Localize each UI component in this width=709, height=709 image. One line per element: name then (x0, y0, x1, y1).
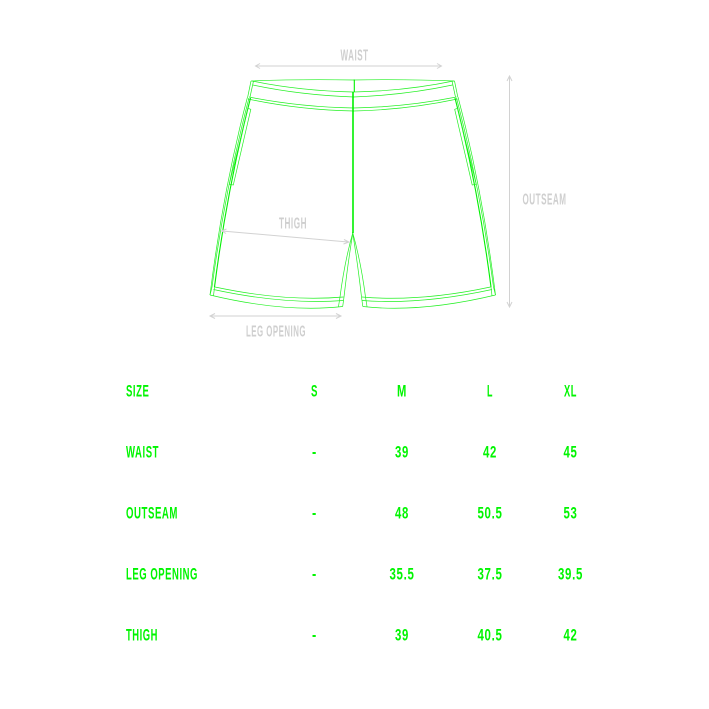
row: size header (126, 382, 577, 401)
row: waist (126, 443, 578, 462)
leg opening measurement (210, 314, 341, 340)
row: leg opening: 39.5 (558, 565, 583, 584)
size table (126, 382, 583, 645)
center seam (353, 80, 354, 233)
row: thigh (126, 626, 578, 645)
row: size header: S (311, 382, 318, 401)
row: thigh: THIGH (126, 626, 158, 645)
row: thigh: - (312, 626, 317, 645)
row: waist: WAIST (126, 443, 159, 462)
waist measurement: WAIST (340, 48, 368, 64)
row: waist: 42 (483, 443, 497, 462)
outseam measurement (507, 76, 566, 307)
row: size header: XL (564, 382, 577, 401)
row: thigh: 40.5 (478, 626, 502, 645)
row: waist: 39 (395, 443, 409, 462)
garment diagram: shorts flat sketch (210, 80, 496, 308)
leg opening measurement: LEG OPENING (246, 324, 306, 340)
thigh measurement: THIGH (279, 216, 307, 232)
measurement annotations (210, 48, 566, 340)
row: outseam: 53 (564, 504, 578, 523)
outseam measurement: OUTSEAM (522, 192, 566, 208)
right half of shorts (352, 80, 496, 308)
row: size header: L (487, 382, 493, 401)
row: outseam: - (312, 504, 317, 523)
row: size header: SIZE (126, 382, 150, 401)
row: waist: - (312, 443, 317, 462)
waist measurement (256, 48, 442, 68)
row: leg opening: LEG OPENING (126, 565, 198, 584)
row: thigh: 39 (395, 626, 409, 645)
row: size header: M (397, 382, 407, 401)
thigh measurement (222, 216, 349, 244)
row: outseam: OUTSEAM (126, 504, 178, 523)
row: leg opening: 35.5 (390, 565, 414, 584)
row: leg opening: - (312, 565, 317, 584)
row: leg opening (126, 565, 583, 584)
row: outseam: 48 (395, 504, 409, 523)
left half of shorts (210, 80, 354, 308)
row: outseam (126, 504, 578, 523)
row: outseam: 50.5 (478, 504, 502, 523)
row: waist: 45 (564, 443, 578, 462)
row: leg opening: 37.5 (478, 565, 502, 584)
row: thigh: 42 (564, 626, 578, 645)
